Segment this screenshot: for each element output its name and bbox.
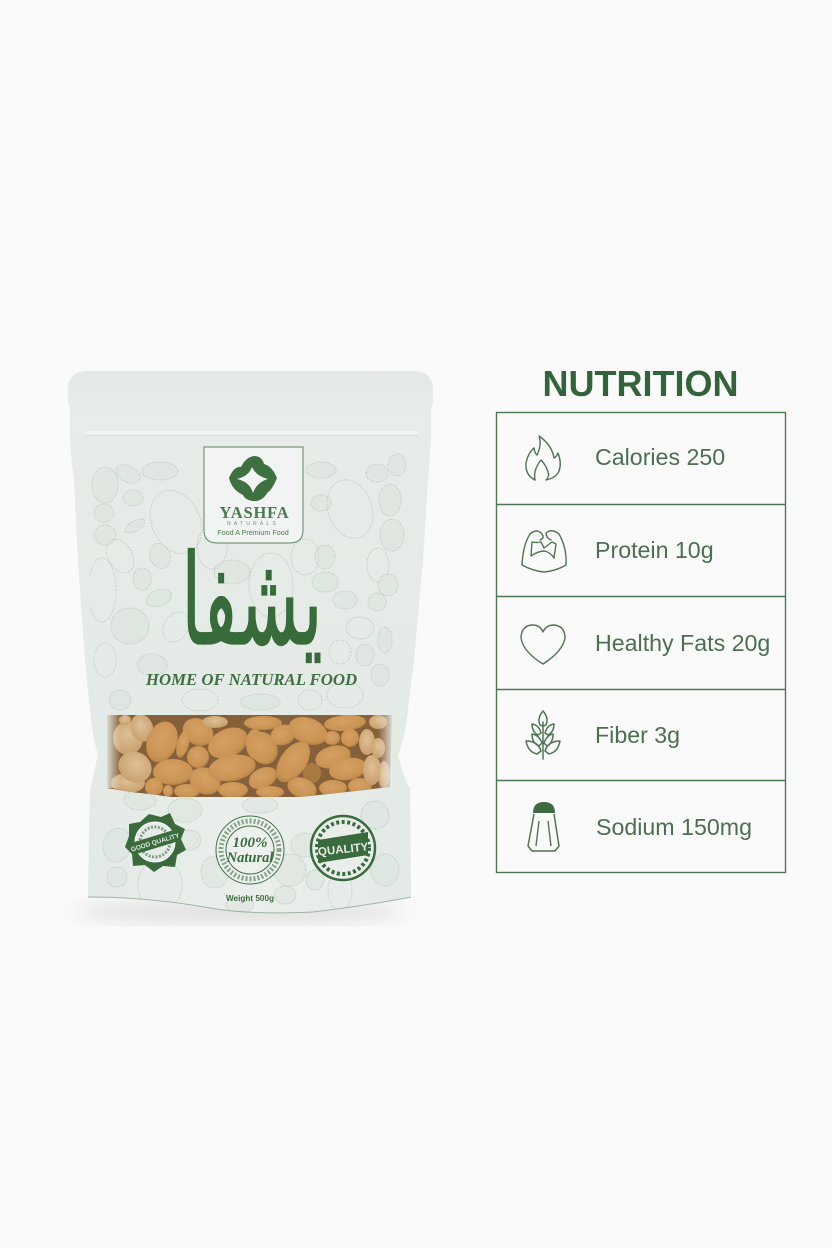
icon: flame bbox=[526, 436, 560, 480]
brand sublabel: NATURALS bbox=[227, 521, 279, 527]
label: fiber: Fiber 3g bbox=[595, 722, 680, 748]
badge: quality bbox=[311, 816, 375, 880]
badge: quality: QUALITY bbox=[317, 841, 369, 859]
nutrition table bbox=[496, 412, 786, 872]
label: calories: Calories 250 bbox=[595, 444, 725, 470]
window film edges bbox=[107, 715, 121, 788]
row: fats bbox=[521, 625, 770, 664]
brand name: YASHFA bbox=[220, 503, 289, 522]
icon: salt shaker bbox=[528, 802, 559, 851]
pouch weight: Weight 500g bbox=[226, 894, 274, 903]
badge: 100% natural bbox=[216, 816, 284, 884]
row: fiber bbox=[526, 711, 680, 759]
logo mark bbox=[229, 456, 277, 501]
label: sodium: Sodium 150mg bbox=[596, 814, 752, 840]
row: sodium bbox=[528, 802, 752, 851]
badge: seal: GOOD QUALITY bbox=[130, 832, 181, 854]
bottom edge bbox=[88, 897, 411, 913]
badge: 100% natural: Natural bbox=[226, 850, 273, 866]
pouch body bbox=[68, 371, 433, 913]
infographic canvas bbox=[68, 370, 786, 926]
row: protein bbox=[522, 531, 714, 572]
nutrition heading: NUTRITION bbox=[543, 363, 738, 404]
icon: wheat bbox=[526, 711, 560, 759]
logo panel bbox=[204, 447, 303, 543]
zip line bbox=[84, 431, 418, 434]
product pouch bbox=[68, 371, 433, 913]
pouch slogan: HOME OF NATURAL FOOD bbox=[145, 670, 357, 689]
lower nut pattern bbox=[99, 790, 399, 913]
label: protein: Protein 10g bbox=[595, 537, 714, 563]
nut pattern upper bbox=[88, 454, 406, 711]
arabic wordmark: يشفا bbox=[181, 528, 323, 675]
badge: seal bbox=[125, 813, 186, 872]
peanut window bbox=[107, 715, 392, 797]
brand tagline: Food A Premium Food bbox=[217, 528, 289, 537]
lower pouch panel bbox=[88, 787, 411, 913]
icon: heart bbox=[521, 625, 565, 664]
pouch shadow bbox=[75, 900, 405, 924]
row: calories bbox=[526, 436, 725, 480]
icon: muscle torso bbox=[522, 531, 566, 572]
label: healthy fats: Healthy Fats 20g bbox=[595, 630, 770, 656]
badge: 100% natural: 100% bbox=[232, 835, 268, 851]
